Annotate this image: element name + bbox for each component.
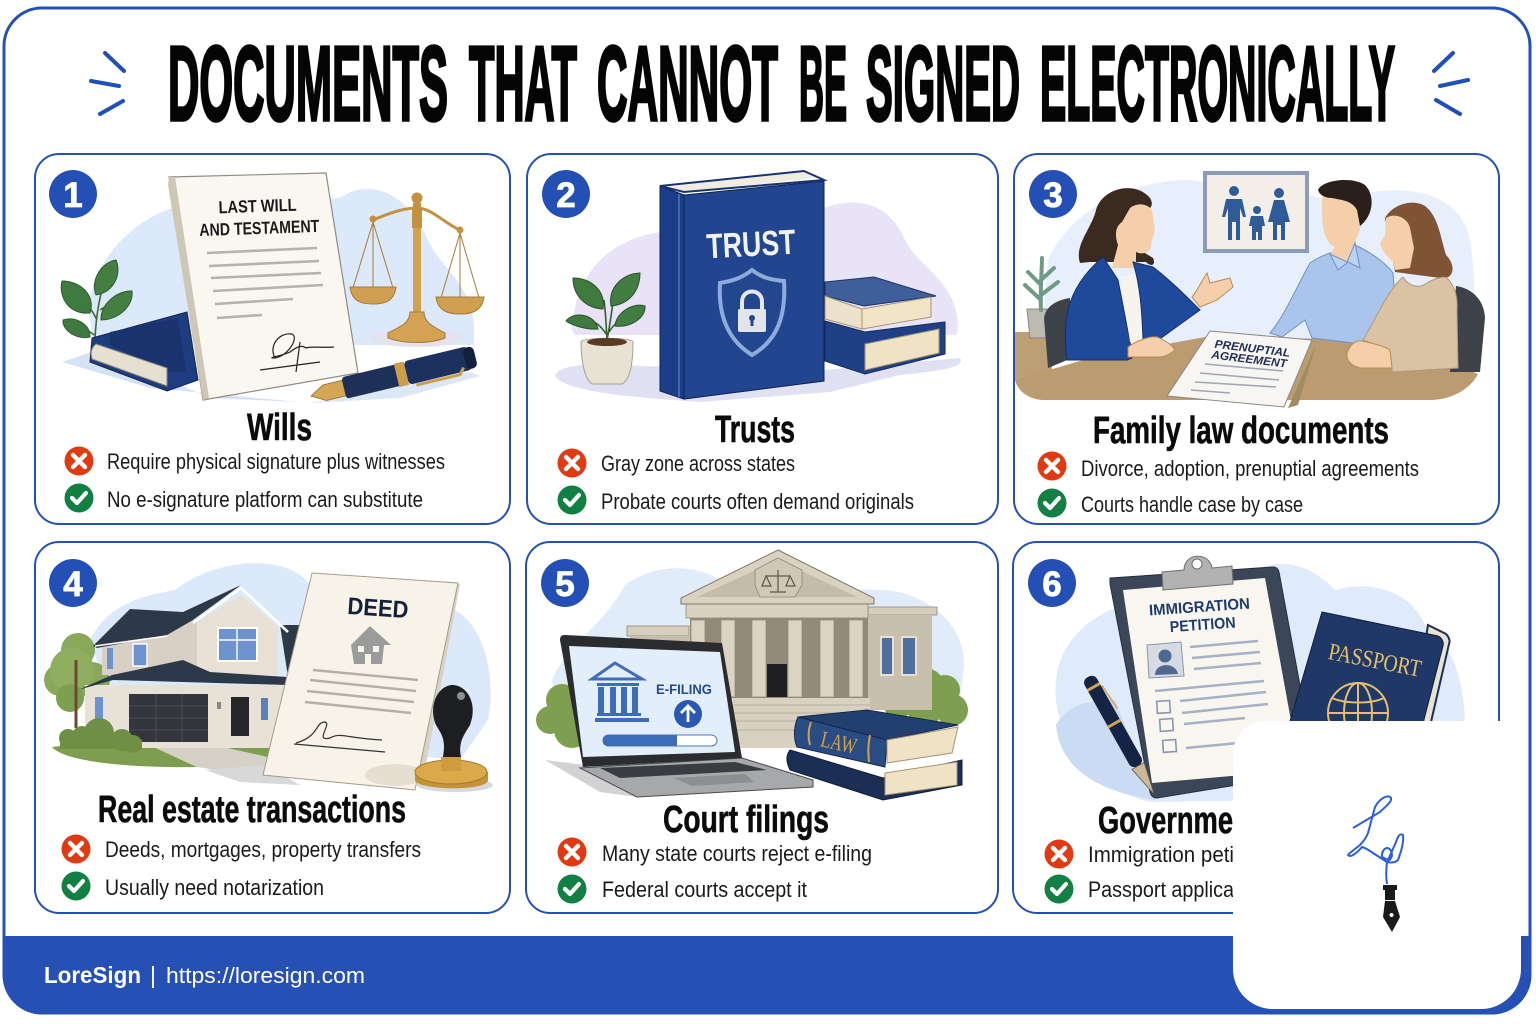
house stamp icon xyxy=(351,626,391,664)
heading: real estate transactions: Real estate transactions xyxy=(98,789,406,831)
illustration: family law meeting xyxy=(1015,173,1485,408)
checkboxes xyxy=(1157,701,1176,752)
text: bullet (partly covered): Passport applica xyxy=(1088,877,1235,902)
number badge 6 xyxy=(1028,559,1076,607)
panel: trusts xyxy=(527,154,998,524)
heading: wills: Wills xyxy=(247,407,312,449)
will document: LAST WILL xyxy=(218,195,297,217)
book xyxy=(90,312,198,391)
number badge 5: 5 xyxy=(555,565,575,604)
prenuptial agreement document: PRENUPTIAL xyxy=(1214,339,1291,360)
upload arrow xyxy=(674,700,702,728)
footer band: | xyxy=(150,962,156,988)
lawyer's chair xyxy=(1044,298,1072,368)
deed document: DEED xyxy=(347,593,409,624)
icon: cross xyxy=(558,838,586,866)
icon: right accent rays xyxy=(1434,53,1468,114)
footer band xyxy=(3,936,1531,1014)
number badge 1 xyxy=(49,170,97,218)
passport: PASSPORT xyxy=(1326,639,1424,683)
number badge 5 xyxy=(541,559,589,607)
illustration: clipboard, passport and pen xyxy=(1056,556,1465,802)
panel: court filings xyxy=(526,542,998,913)
trust book: TRUST xyxy=(706,223,796,266)
clipboard xyxy=(1110,556,1316,798)
applicant photo xyxy=(1147,642,1184,678)
title: DOCUMENTS xyxy=(168,25,448,143)
text: bullet: Federal courts accept it xyxy=(602,877,807,902)
progress bar xyxy=(603,735,717,746)
clipboard: PETITION xyxy=(1169,615,1236,636)
trust book xyxy=(660,171,824,399)
number badge 2 xyxy=(542,170,590,218)
title: SIGNED xyxy=(866,25,1020,143)
law books xyxy=(787,710,962,800)
laptop: E-FILING xyxy=(656,681,712,697)
text: bullet: No e-signature platform can substitute xyxy=(107,487,423,512)
text: bullet (partly covered): Immigration peti xyxy=(1088,842,1234,867)
heading: government (partly covered): Governme xyxy=(1098,800,1233,842)
icon: cross xyxy=(1038,452,1066,480)
credenza and plant xyxy=(1015,258,1058,380)
family picture xyxy=(1205,173,1307,251)
house xyxy=(78,585,300,748)
fountain pen xyxy=(308,345,479,410)
number badge 4 xyxy=(49,559,97,607)
illustration: trust book, books and plant xyxy=(555,171,961,402)
heading: court filings: Court filings xyxy=(663,799,829,841)
text: bullet: Require physical signature plus witnesses xyxy=(107,449,445,474)
icon: check xyxy=(1038,488,1066,518)
panel: government documents xyxy=(1013,542,1499,913)
icon: cross xyxy=(558,448,586,478)
law books: LAW xyxy=(819,726,859,759)
icon: check xyxy=(62,872,90,900)
courthouse icon on screen xyxy=(592,663,649,722)
icon: check xyxy=(1044,874,1074,904)
plant in pot xyxy=(566,273,645,384)
icon: cross xyxy=(62,834,90,864)
clipboard: IMMIGRATION xyxy=(1149,596,1250,620)
text: bullet: Courts handle case by case xyxy=(1081,492,1303,517)
courthouse xyxy=(627,550,937,748)
number badge 1: 1 xyxy=(63,176,83,215)
number badge 4: 4 xyxy=(63,565,83,604)
icon: signature and fountain nib logo xyxy=(1348,796,1403,932)
text: bullet: Many state courts reject e-filing xyxy=(602,841,872,866)
icon: cross xyxy=(1044,840,1074,868)
notary stamp xyxy=(415,685,493,792)
number badge 2: 2 xyxy=(556,176,576,215)
title: CANNOT xyxy=(597,25,778,143)
title xyxy=(168,25,1395,143)
pen xyxy=(1082,672,1163,798)
illustration: will, book, scales and pen xyxy=(61,173,484,410)
bushes xyxy=(59,718,142,753)
text: bullet: Gray zone across states xyxy=(601,451,795,476)
title: BE xyxy=(799,25,847,143)
heading: family law documents: Family law documents xyxy=(1093,410,1389,452)
tree xyxy=(44,633,110,728)
text: bullet: Probate courts often demand originals xyxy=(601,489,914,514)
will document: AND TESTAMENT xyxy=(199,216,320,240)
globe xyxy=(1328,683,1388,743)
title: THAT xyxy=(469,25,577,143)
text: bullet: Divorce, adoption, prenuptial agreements xyxy=(1081,456,1419,481)
heading: trusts: Trusts xyxy=(715,409,795,451)
white logo tile xyxy=(1233,721,1527,1009)
shield with lock xyxy=(720,270,784,355)
will document xyxy=(168,173,358,400)
prenuptial agreement document xyxy=(1167,331,1316,408)
laptop xyxy=(545,635,813,797)
icon: left accent rays xyxy=(91,53,124,114)
stacked books xyxy=(825,277,945,374)
attorney xyxy=(1065,188,1233,360)
icon: check xyxy=(64,484,94,512)
bushes xyxy=(536,668,968,748)
panel: wills xyxy=(35,154,510,524)
icon: check xyxy=(558,874,586,904)
footer band: https://loresign.com xyxy=(166,963,365,988)
deed document xyxy=(263,573,460,790)
panel: family law documents xyxy=(1014,154,1499,524)
text: bullet: Deeds, mortgages, property transfers xyxy=(105,837,421,862)
footer band: LoreSign xyxy=(44,962,141,988)
icon: cross xyxy=(64,446,94,476)
scales of justice xyxy=(350,192,484,342)
number badge 6: 6 xyxy=(1042,565,1062,604)
woman client xyxy=(1347,203,1458,372)
number badge 3 xyxy=(1029,170,1077,218)
panel: real estate transactions xyxy=(35,542,510,913)
man xyxy=(1270,180,1395,345)
table xyxy=(1015,337,1478,400)
number badge 3: 3 xyxy=(1043,176,1063,215)
icon: check xyxy=(558,486,586,514)
text: bullet: Usually need notarization xyxy=(105,875,324,900)
woman client's chair xyxy=(1450,286,1485,372)
illustration: house, deed and stamp xyxy=(44,563,493,792)
plant xyxy=(61,260,132,338)
illustration: courthouse, laptop and law books xyxy=(536,550,968,800)
lawn and driveway xyxy=(52,742,300,785)
prenuptial agreement document: AGREEMENT xyxy=(1210,349,1288,371)
passport xyxy=(1286,612,1450,743)
